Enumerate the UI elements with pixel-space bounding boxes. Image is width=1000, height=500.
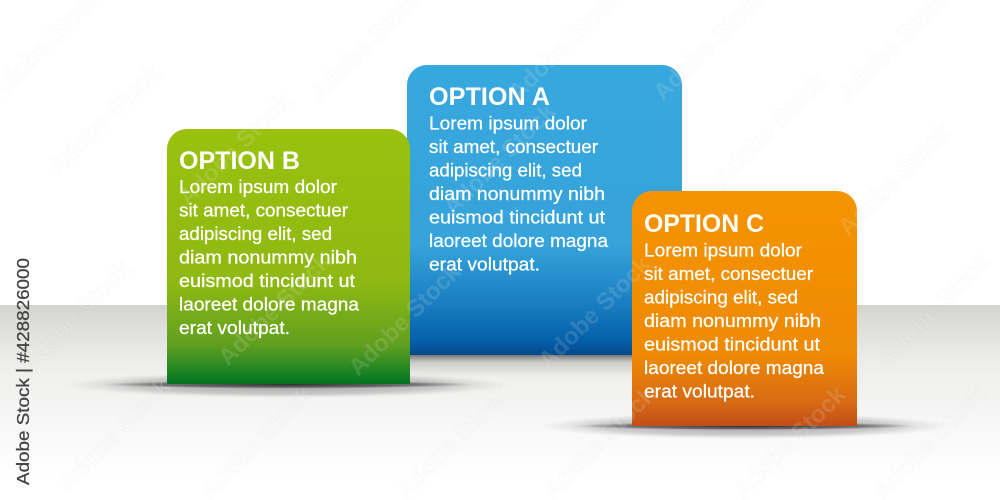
text block: option C (644, 240, 825, 402)
watermarks: Adobe Stock (343, 258, 467, 381)
text block: option B: sit amet, consectuer (179, 200, 348, 220)
shadow: option A card (410, 354, 635, 378)
text block: option A: diam nonummy nibh (429, 184, 605, 204)
stock id label: Adobe Stock | #428826000 (13, 258, 33, 485)
watermarks: Adobe Stock (213, 248, 337, 371)
text block: option A: erat volutpat. (429, 254, 540, 274)
text block: option C: Lorem ipsum dolor (644, 240, 802, 260)
shadow: option B card (66, 372, 510, 398)
text block: option B: adipiscing elit, sed (179, 224, 332, 244)
text block: option B: euismod tincidunt ut (179, 271, 355, 291)
watermarks: Adobe Stock (708, 68, 832, 191)
shadow: option C card (540, 413, 950, 439)
text block: option A: laoreet dolore magna (429, 231, 609, 251)
panel: option A (407, 65, 682, 355)
text block: option A (429, 114, 609, 274)
heading: option C: OPTION C (644, 210, 764, 238)
text block: option B: diam nonummy nibh (179, 248, 357, 268)
watermarks: Adobe Stock (53, 373, 177, 496)
watermarks: Adobe Stock (173, 88, 297, 211)
watermarks: Adobe Stock (43, 58, 167, 181)
text block: option C: laoreet dolore magna (644, 358, 825, 378)
text block: option C: diam nonummy nibh (644, 311, 821, 331)
floor background (0, 305, 1000, 480)
heading: option B: OPTION B (179, 147, 300, 175)
text block: option B: Lorem ipsum dolor (179, 177, 337, 197)
text block: option C: euismod tincidunt ut (644, 334, 820, 354)
text block: option A: adipiscing elit, sed (429, 160, 582, 180)
text block: option B (179, 177, 360, 338)
text block: option B: erat volutpat. (179, 318, 290, 338)
text block: option C: erat volutpat. (644, 382, 755, 402)
watermarks: Adobe Stock (873, 248, 997, 371)
text block: option C: sit amet, consectuer (644, 264, 813, 284)
text block: option B: laoreet dolore magna (179, 294, 360, 314)
watermarks: Adobe Stock (13, 255, 137, 378)
text block: option A: Lorem ipsum dolor (429, 114, 587, 134)
text block: option C: adipiscing elit, sed (644, 288, 798, 308)
text block: option A: euismod tincidunt ut (429, 208, 605, 228)
text block: option A: sit amet, consectuer (429, 137, 598, 157)
watermarks: Adobe Stock (533, 251, 657, 374)
watermarks: Adobe Stock (833, 118, 957, 241)
panel: option B (167, 129, 410, 384)
watermarks: Adobe Stock (438, 98, 562, 221)
heading: option A: OPTION A (429, 83, 550, 111)
panel: option C (632, 191, 857, 426)
